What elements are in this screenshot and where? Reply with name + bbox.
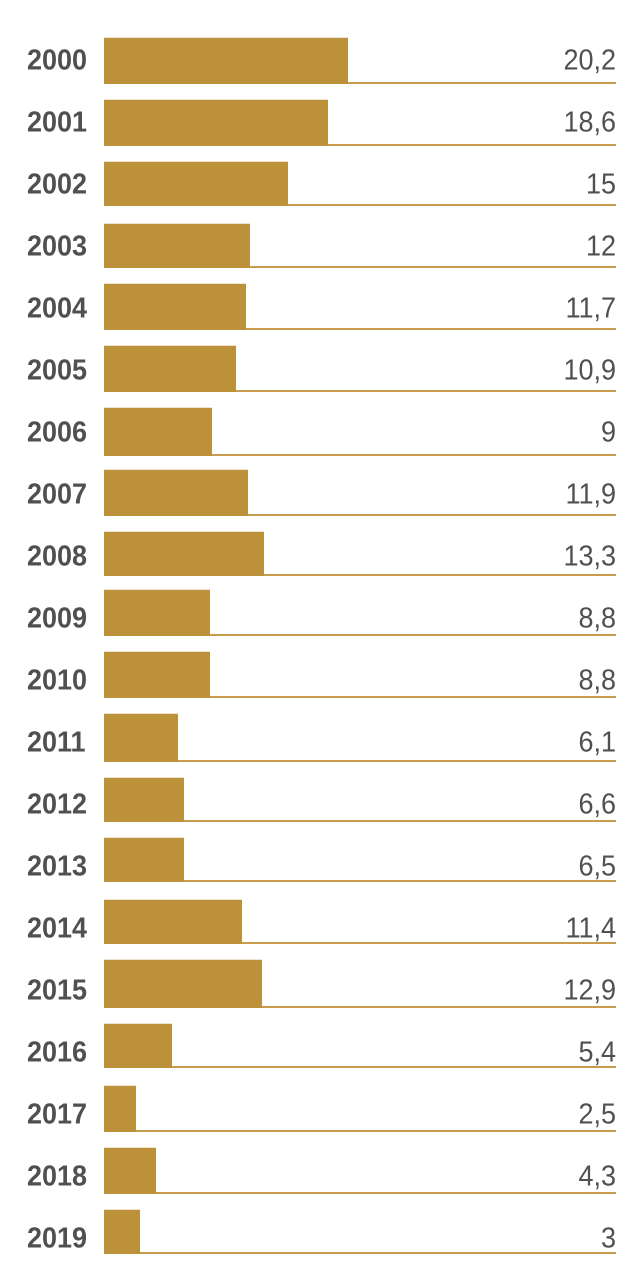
row: 2007: 11,9 <box>565 478 616 510</box>
row: 2015: 2015 <box>27 974 87 1006</box>
row: 2010 <box>27 651 616 698</box>
row: 2000: 2000 <box>27 44 87 76</box>
row: 2012 <box>27 777 616 822</box>
row: 2018 <box>27 1147 616 1194</box>
row: 2008 <box>27 531 616 576</box>
row: 2012: 2012 <box>27 788 87 820</box>
row: 2008: 13,3 <box>563 540 616 572</box>
row: 2014 <box>27 899 616 944</box>
row: 2013: 2013 <box>27 850 87 882</box>
row: 2004: 11,7 <box>565 292 616 324</box>
row: 2015 <box>27 959 616 1008</box>
row: 2001: 18,6 <box>563 106 616 138</box>
row: 2003: 2003 <box>27 230 87 262</box>
row: 2005 <box>27 345 616 392</box>
row: 2015: 12,9 <box>563 974 616 1006</box>
row: 2001: 2001 <box>27 106 87 138</box>
row: 2017: 2017 <box>27 1098 87 1130</box>
row: 2018: 4,3 <box>578 1160 616 1192</box>
row: 2006 <box>27 407 616 456</box>
row: 2011: 2011 <box>27 726 86 758</box>
row: 2007 <box>27 469 616 516</box>
row: 2004: 2004 <box>27 292 87 324</box>
row: 2019 <box>27 1209 616 1254</box>
row: 2000: 20,2 <box>563 44 616 76</box>
row: 2010: 2010 <box>27 664 87 696</box>
row: 2007: 2007 <box>27 478 87 510</box>
row: 2006: 2006 <box>27 416 87 448</box>
row: 2004 <box>27 283 616 330</box>
row: 2017: 2,5 <box>578 1098 616 1130</box>
row: 2005: 10,9 <box>563 354 616 386</box>
row: 2011: 6,1 <box>578 726 616 758</box>
row: 2009: 2009 <box>27 602 87 634</box>
row: 2002 <box>27 161 616 206</box>
row: 2018: 2018 <box>27 1160 87 1192</box>
row: 2008: 2008 <box>27 540 87 572</box>
row: 2009 <box>27 589 616 636</box>
row: 2003 <box>27 223 616 268</box>
row: 2014: 2014 <box>27 912 87 944</box>
row: 2003: 12 <box>586 230 616 262</box>
row: 2005: 2005 <box>27 354 87 386</box>
row: 2000 <box>27 37 616 84</box>
row: 2016: 2016 <box>27 1036 87 1068</box>
row: 2016: 5,4 <box>578 1036 616 1068</box>
row: 2001 <box>27 99 616 146</box>
row: 2006: 9 <box>601 416 616 448</box>
row: 2014: 11,4 <box>565 912 616 944</box>
row: 2019: 3 <box>601 1222 616 1254</box>
row: 2009: 8,8 <box>578 602 616 634</box>
row: 2012: 6,6 <box>578 788 616 820</box>
row: 2011 <box>27 713 616 762</box>
row: 2002: 2002 <box>27 168 87 200</box>
row: 2016 <box>27 1023 616 1068</box>
row: 2019: 2019 <box>27 1222 87 1254</box>
row: 2002: 15 <box>586 168 616 200</box>
row: 2017 <box>27 1085 616 1132</box>
row: 2013: 6,5 <box>578 850 616 882</box>
row: 2010: 8,8 <box>578 664 616 696</box>
row: 2013 <box>27 837 616 882</box>
